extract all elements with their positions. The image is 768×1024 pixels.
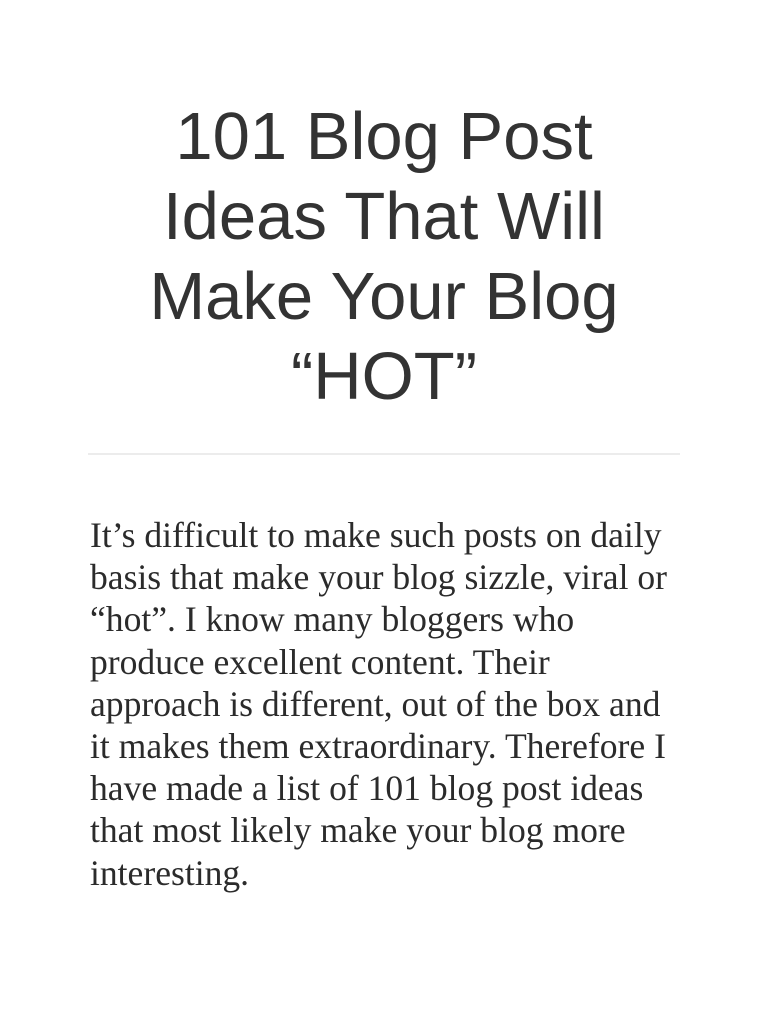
intro paragraph: approach is different, out of the box and	[90, 684, 660, 724]
intro paragraph: that most likely make your blog more	[90, 810, 626, 850]
title: Ideas That Will	[163, 179, 605, 254]
title: “HOT”	[291, 339, 477, 414]
intro paragraph: It’s difficult to make such posts on daily	[90, 515, 662, 555]
intro paragraph: basis that make your blog sizzle, viral or	[90, 557, 667, 597]
intro paragraph: produce excellent content. Their	[90, 642, 550, 682]
intro paragraph: “hot”. I know many bloggers who	[90, 599, 574, 639]
intro paragraph	[90, 515, 667, 893]
intro paragraph: it makes them extraordinary. Therefore I	[90, 726, 666, 766]
title	[149, 99, 619, 414]
intro paragraph: interesting.	[90, 853, 249, 893]
intro paragraph: have made a list of 101 blog post ideas	[90, 768, 643, 808]
title: Make Your Blog	[149, 259, 619, 334]
title: 101 Blog Post	[175, 99, 593, 174]
